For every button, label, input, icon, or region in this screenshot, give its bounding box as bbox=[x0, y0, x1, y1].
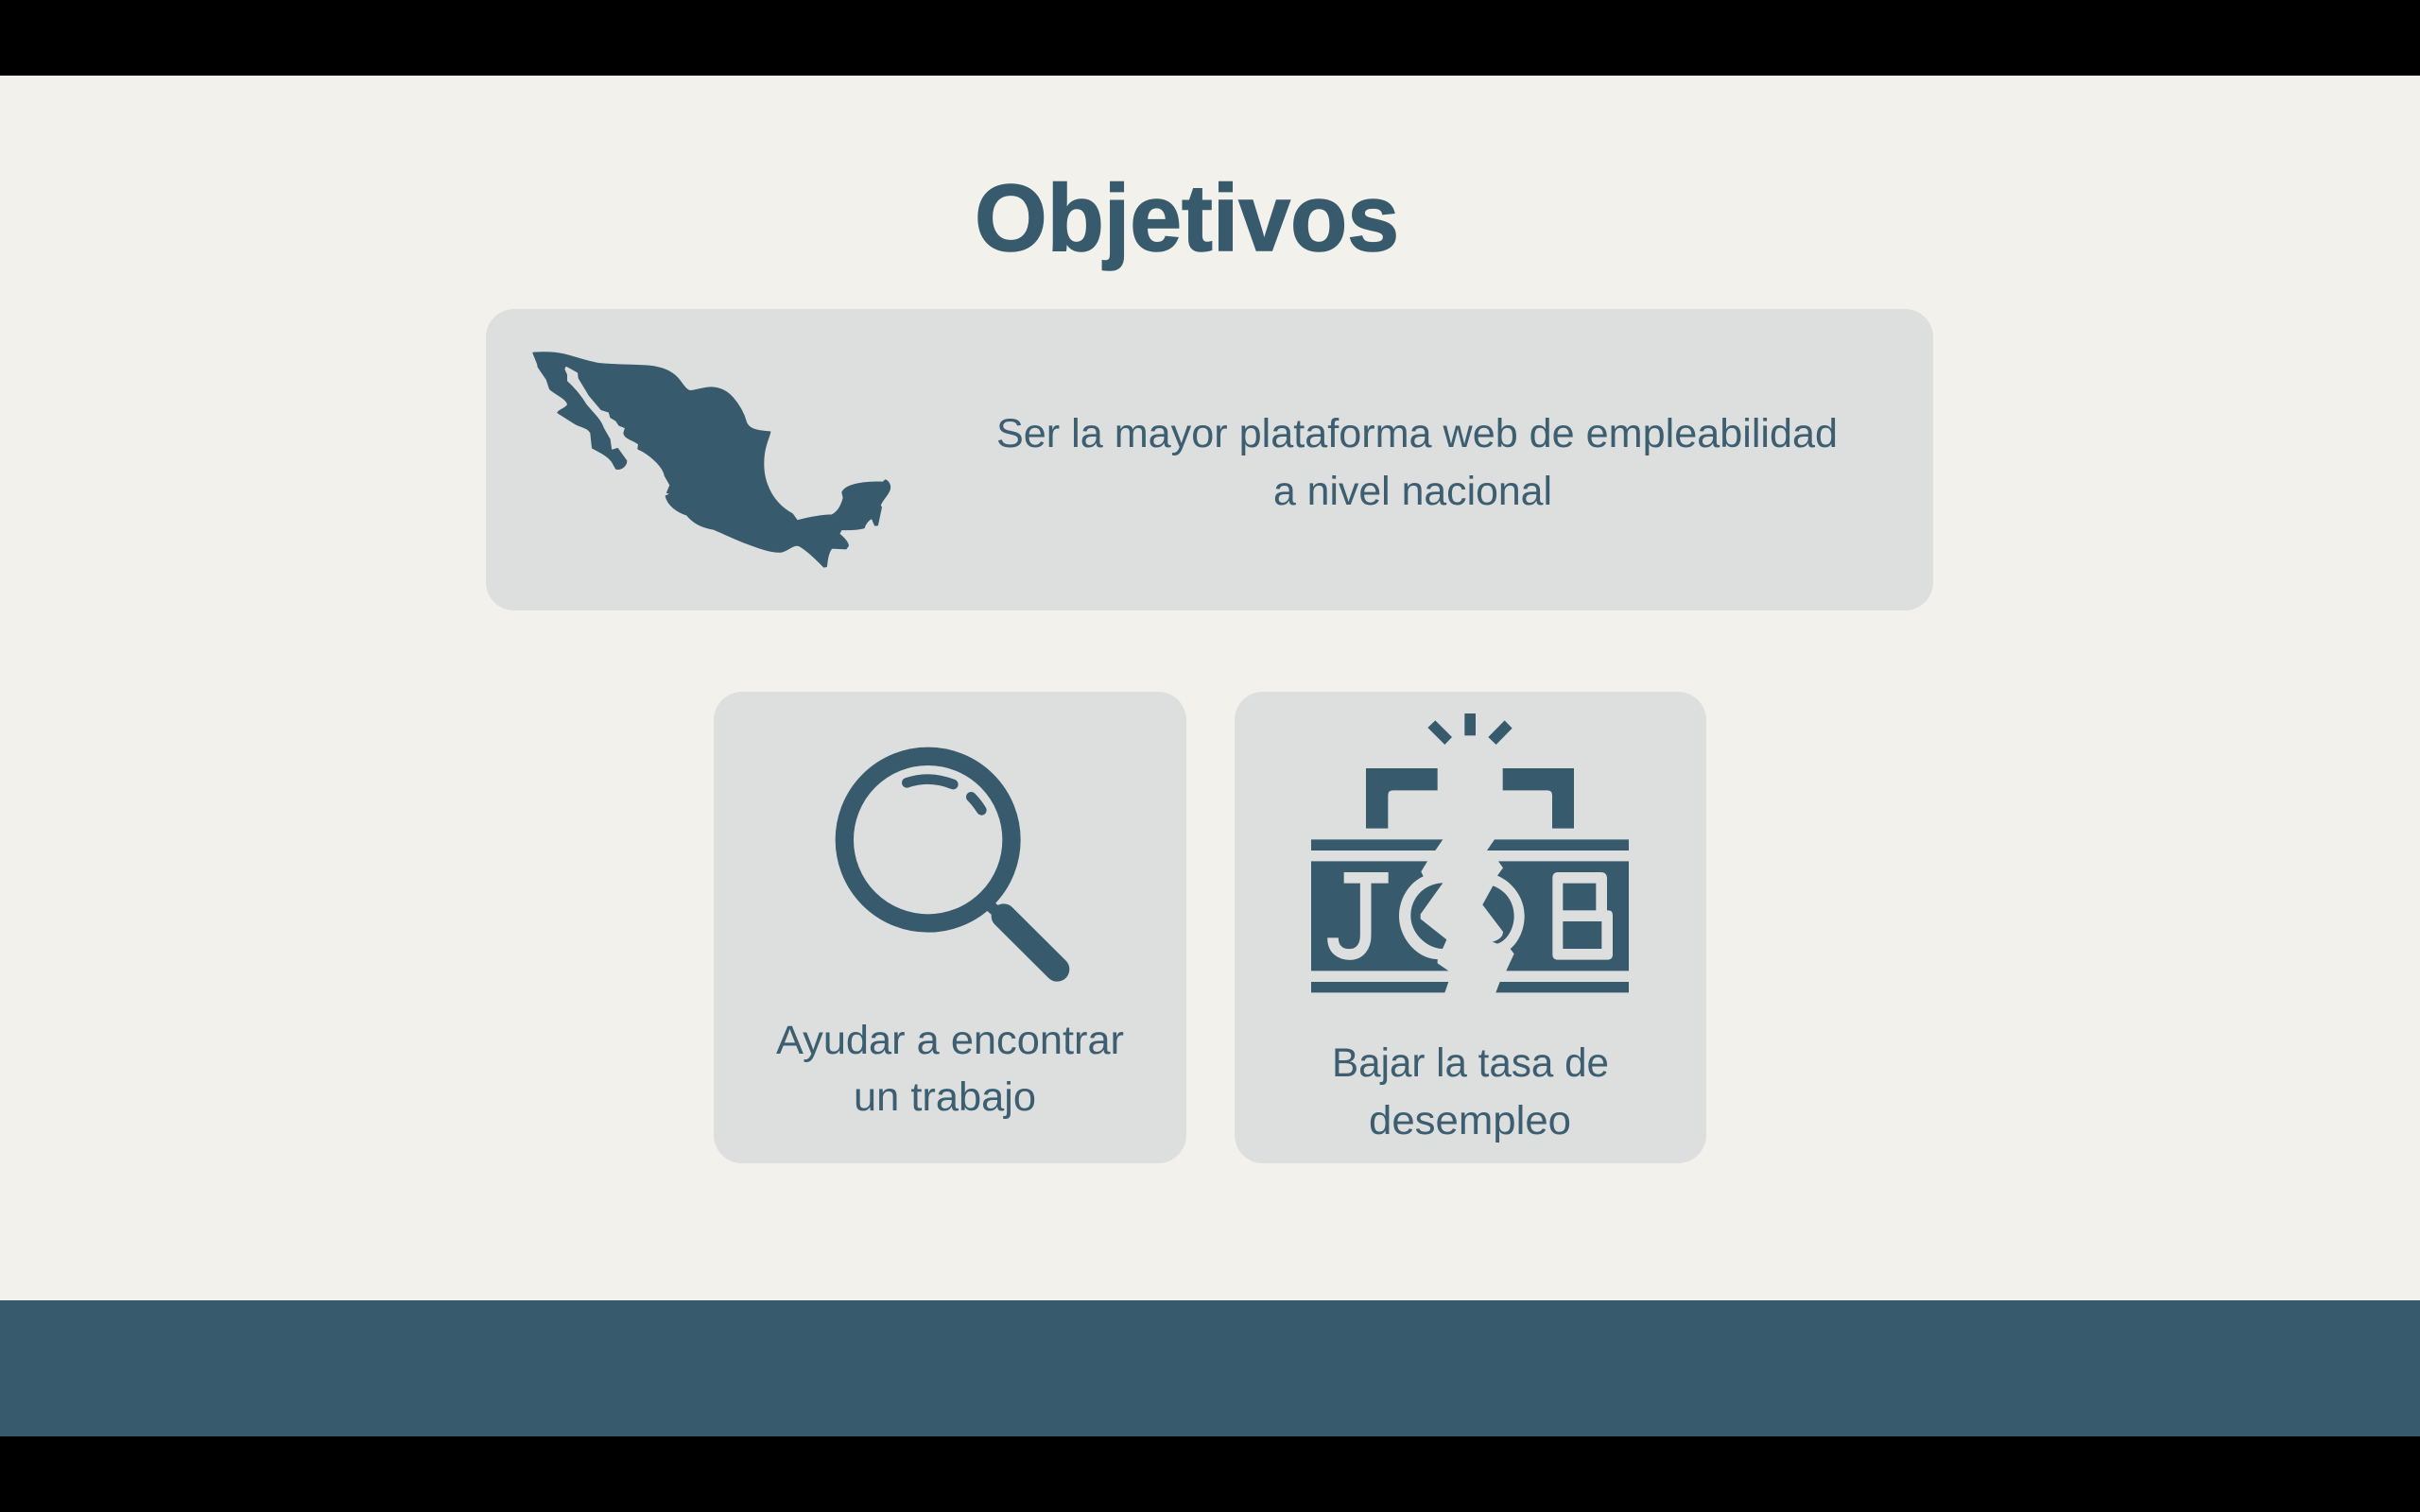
panel text bbox=[996, 411, 1838, 514]
card text: desempleo bbox=[1369, 1098, 1571, 1143]
icon: broken job briefcase bbox=[1311, 713, 1629, 992]
card text: Ayudar a encontrar bbox=[776, 1018, 1124, 1063]
panel: find a job bbox=[714, 692, 1186, 1163]
card text bbox=[1332, 1040, 1609, 1143]
footer band bbox=[0, 1300, 2420, 1436]
card text bbox=[776, 1018, 1124, 1120]
panel: national platform goal bbox=[486, 309, 1933, 610]
panel: lower unemployment bbox=[1235, 692, 1706, 1163]
title: Objetivos bbox=[975, 165, 1399, 271]
panel text: Ser la mayor plataforma web de empleabilidad bbox=[996, 411, 1838, 456]
icon: magnifying glass bbox=[844, 756, 1057, 970]
card text: un trabajo bbox=[854, 1074, 1036, 1120]
panel text: a nivel nacional bbox=[1273, 469, 1552, 514]
card text: Bajar la tasa de bbox=[1332, 1040, 1609, 1086]
icon: map of Mexico bbox=[533, 352, 890, 567]
